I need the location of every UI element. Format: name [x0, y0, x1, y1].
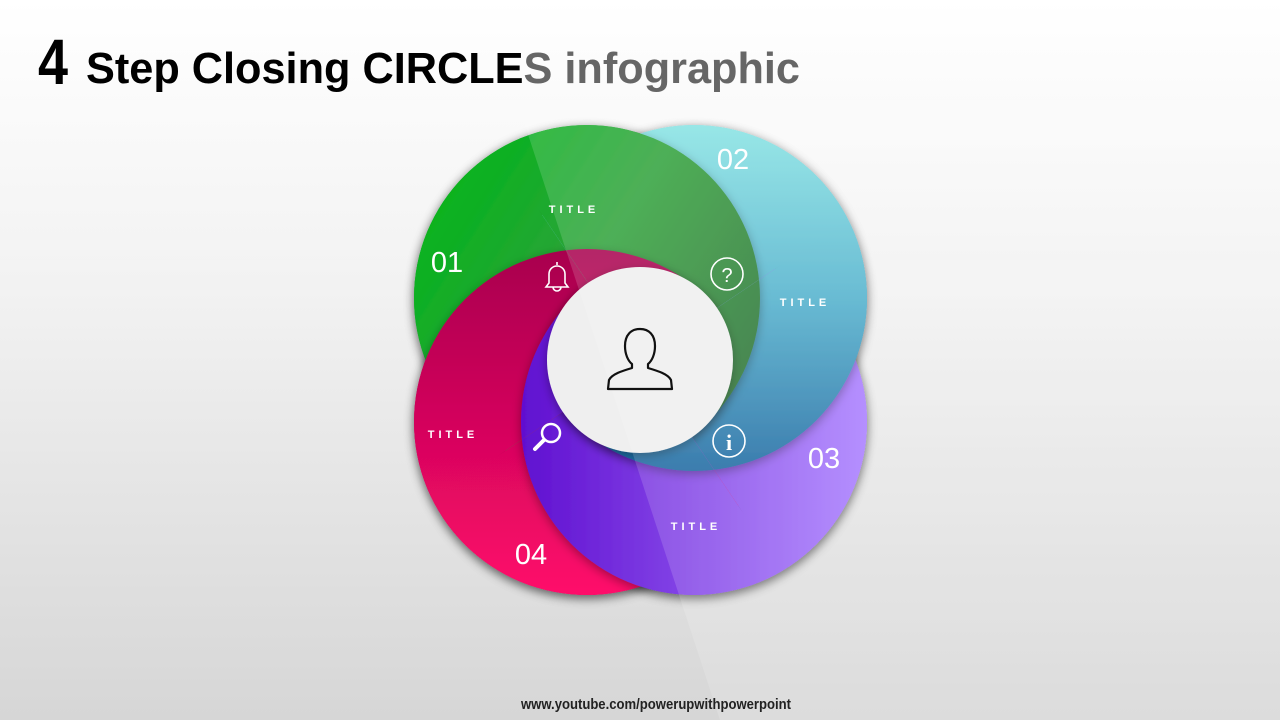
- highlight band: [520, 110, 1280, 720]
- title: [38, 26, 800, 98]
- icon: info: i: [726, 430, 732, 455]
- sector: pink on top: [496, 122, 852, 308]
- sector: purple on top: [408, 147, 588, 504]
- title: 4: [38, 26, 68, 98]
- number 04: 04: [515, 539, 547, 571]
- icon: bell: [546, 262, 568, 291]
- sector: cyan on top: [426, 412, 786, 604]
- center white circle: [547, 267, 733, 453]
- footer url: www.youtube.com/powerupwithpowerpoint: [520, 696, 791, 713]
- title: Step Closing CIRCLES infographic: [86, 44, 800, 93]
- icon: question: [711, 258, 743, 290]
- icon: question: ?: [721, 265, 733, 287]
- title label 2: TITLE: [780, 297, 830, 309]
- number 02: 02: [717, 144, 749, 176]
- number 03: 03: [808, 443, 840, 475]
- title label 1: TITLE: [549, 204, 599, 216]
- sector: green on top: [692, 218, 872, 577]
- base layer: [414, 125, 867, 595]
- icon: info: [713, 425, 745, 457]
- closing circles: [414, 125, 867, 595]
- title label 3: TITLE: [671, 521, 721, 533]
- icon: search: [535, 424, 560, 449]
- icon: person: [608, 329, 672, 389]
- number 01: 01: [431, 247, 463, 279]
- title label 4: TITLE: [428, 429, 478, 441]
